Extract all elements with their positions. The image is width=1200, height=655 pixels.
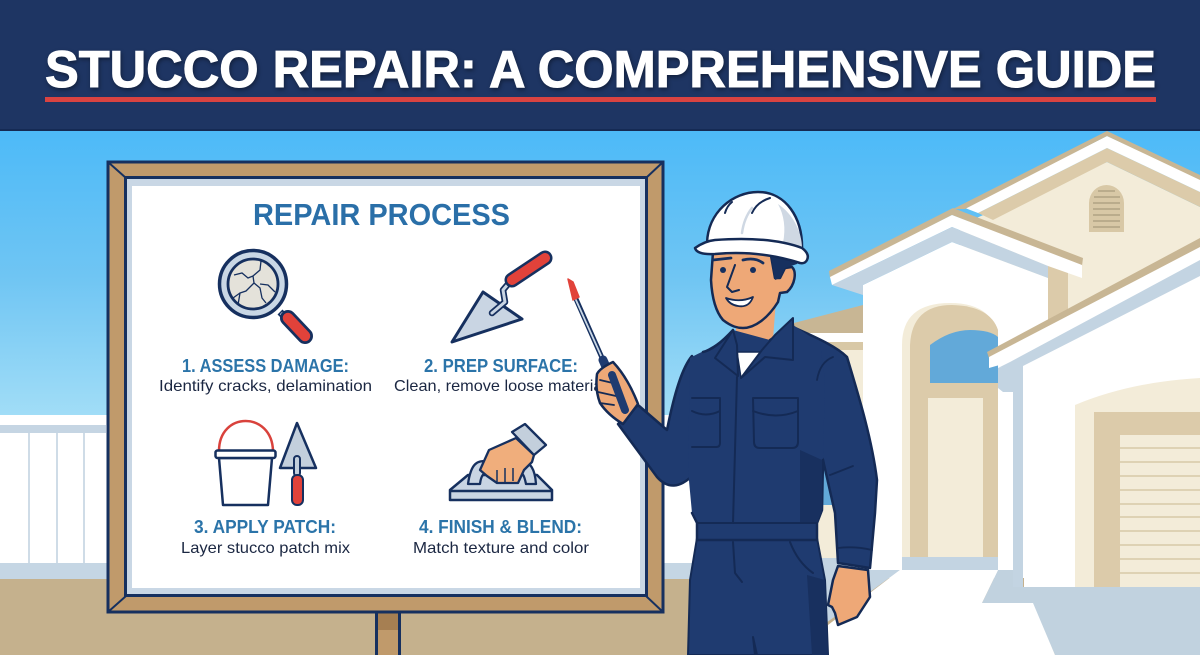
step 1 description: Identify cracks, delamination (159, 378, 372, 395)
pointing arm (618, 356, 720, 486)
step 3: apply patch (181, 421, 350, 557)
torso (688, 325, 825, 540)
wooden frame (108, 162, 663, 612)
raised hand (596, 362, 638, 424)
attic vent (1089, 185, 1124, 232)
sign board panel (108, 162, 663, 612)
sleeve details (817, 357, 872, 550)
house (790, 131, 1200, 655)
eyes (720, 267, 726, 273)
hard hat (695, 192, 808, 263)
step 2 heading: 2. PREP SURFACE: (424, 356, 578, 376)
icon: hand on float (450, 424, 552, 500)
step 2: prep surface (394, 258, 606, 395)
step 3 description: Layer stucco patch mix (181, 540, 350, 557)
right arm (790, 327, 877, 568)
title underline (45, 97, 1156, 102)
step 2 description: Clean, remove loose material (394, 378, 606, 395)
placket (733, 377, 737, 523)
t-shirt (737, 352, 761, 378)
legs (688, 538, 828, 655)
sign post (375, 612, 401, 655)
upper gable (953, 131, 1200, 340)
lower hand (828, 566, 870, 625)
torso shading (800, 450, 822, 523)
step 4: finish and blend (413, 424, 590, 557)
tan pillar (1048, 265, 1068, 325)
entry gable roof (829, 208, 1083, 295)
fence (0, 415, 700, 579)
step 1 heading: 1. ASSESS DAMAGE: (182, 356, 349, 376)
entry wall (863, 242, 1048, 570)
left collar (715, 330, 738, 376)
icon: magnifying glass over cracked surface (220, 250, 305, 336)
right collar (741, 318, 793, 378)
icon: trowel (452, 258, 545, 342)
title: STUCCO REPAIR: A COMPREHENSIVE GUIDE (45, 41, 1156, 99)
sky background (0, 131, 1200, 421)
step 4 heading: 4. FINISH & BLEND: (419, 517, 582, 537)
header banner (0, 0, 1200, 131)
back wing of house (790, 305, 900, 625)
step 1: assess damage (159, 250, 372, 395)
neck (735, 300, 776, 354)
walkway (828, 570, 1055, 655)
right pocket (753, 398, 798, 448)
step 3 heading: 3. APPLY PATCH: (194, 517, 336, 537)
smile (726, 297, 753, 306)
belt line (697, 522, 817, 524)
pointer (568, 279, 625, 410)
torso outline (692, 325, 823, 540)
driveway (982, 570, 1200, 655)
ground (0, 578, 1200, 655)
nose (727, 265, 739, 292)
panel heading: REPAIR PROCESS (253, 197, 510, 232)
trouser shading (807, 575, 828, 655)
eyebrows (713, 258, 763, 263)
left pocket (692, 398, 720, 447)
garage wing (987, 238, 1200, 587)
head (711, 250, 798, 328)
trouser details (733, 542, 813, 582)
arched entry (902, 303, 998, 570)
garage door (1075, 378, 1200, 587)
hair (770, 250, 798, 280)
icon: bucket and trowel (216, 421, 316, 505)
step 4 description: Match texture and color (413, 540, 590, 557)
worker figure (568, 192, 877, 655)
